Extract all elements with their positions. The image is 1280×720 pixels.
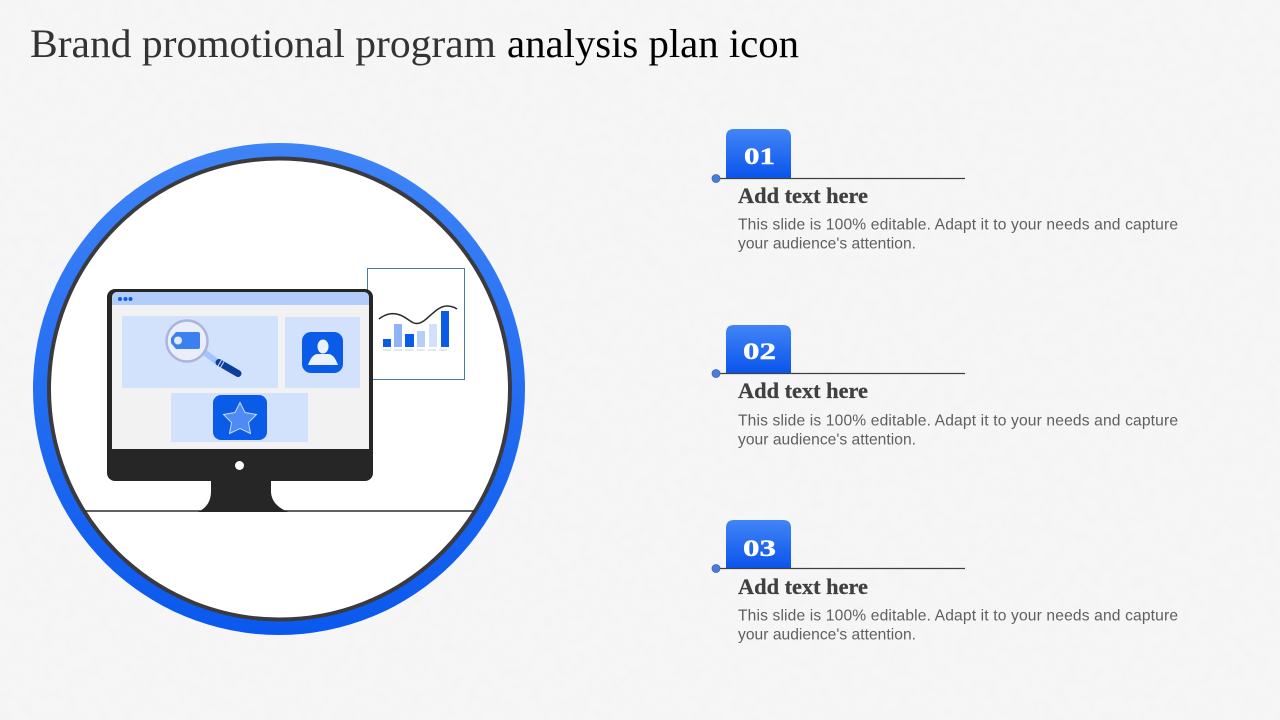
item 01 [712,129,1178,252]
body text: your audience's attention. [738,236,916,252]
bars [383,311,449,350]
power button [235,461,244,470]
monitor [107,289,373,481]
number tab: 03 [743,536,776,561]
heading: Add text here [738,574,868,599]
screen [112,292,369,449]
rule with dot [712,174,965,182]
window title bar [112,292,369,305]
rule with dot [712,370,965,378]
title [30,21,799,66]
body text: This slide is 100% editable. Adapt it to your needs and capture [738,412,1178,430]
body text [738,216,1178,252]
number tab [726,520,791,568]
panel: star icon [171,393,308,442]
number tab: 02 [743,339,776,364]
body text [738,412,1178,448]
number tab: 01 [744,144,775,169]
number tab [726,129,791,178]
body text: This slide is 100% editable. Adapt it to your needs and capture [738,608,1178,624]
heading: Add text here [738,378,868,403]
trend curve [379,306,457,324]
monitor stand [198,480,288,512]
rule with dot [712,564,965,572]
illustration: circle with monitor [33,143,525,635]
heading: Add text here [738,183,868,208]
title: analysis plan icon [507,21,799,66]
number tab [726,325,791,373]
body text: your audience's attention. [738,626,916,644]
item 03 [712,520,1178,644]
floor line [85,510,475,512]
body text: your audience's attention. [738,432,916,448]
item 02 [712,325,1178,448]
body text [738,608,1178,644]
body text: This slide is 100% editable. Adapt it to your needs and capture [738,216,1178,234]
title: Brand promotional program [30,21,496,66]
panel: user icon [285,317,360,388]
white inner disc with dark border [49,158,510,620]
blue outer ring [33,143,525,635]
chart card [368,268,464,380]
panel: magnifier and tag [122,316,278,388]
